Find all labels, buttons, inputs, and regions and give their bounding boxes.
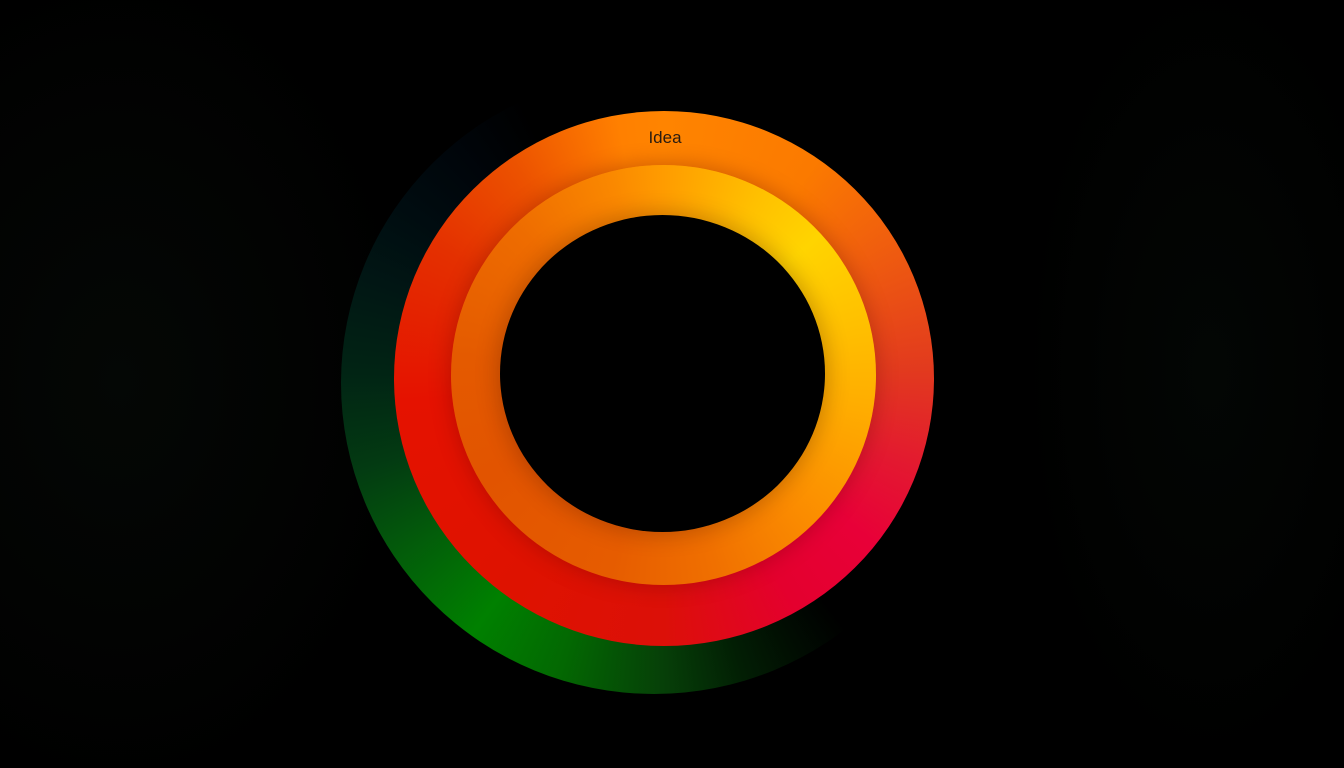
diagram: concentric rings <box>341 111 934 694</box>
label: Idea: Idea <box>648 128 682 147</box>
outer ring: green fading to black <box>341 72 967 694</box>
middle ring: orange to red <box>394 111 934 646</box>
inner ring: yellow to orange <box>451 165 876 585</box>
center circle: black <box>500 215 825 532</box>
